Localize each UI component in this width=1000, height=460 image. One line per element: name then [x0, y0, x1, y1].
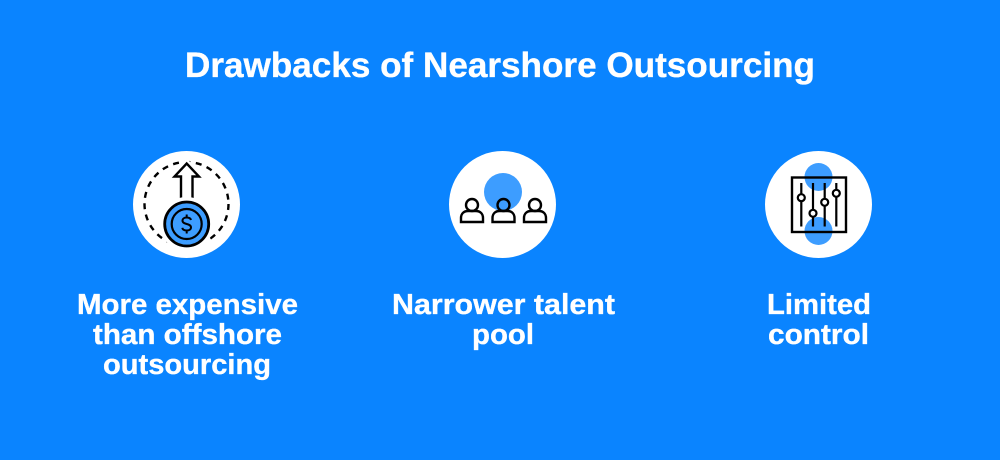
panel: narrower talent pool [392, 151, 616, 351]
label: narrower talent pool [392, 289, 616, 351]
icon: three people [449, 151, 556, 258]
icon: coin with up arrow [133, 151, 240, 258]
label: limited control: Limited [767, 289, 871, 321]
panel: limited control [765, 151, 872, 351]
label: narrower talent pool: Narrower talent [392, 289, 616, 321]
label: more expensive: outsourcing [103, 349, 271, 381]
title: Drawbacks of Nearshore Outsourcing [185, 46, 815, 85]
label: limited control [767, 289, 871, 351]
label: limited control: control [768, 319, 869, 351]
label: more expensive [77, 289, 298, 381]
icon: sliders [765, 151, 872, 258]
label: narrower talent pool: pool [472, 319, 534, 351]
label: more expensive: More expensive [77, 289, 298, 321]
panel: more expensive [77, 151, 298, 381]
label: more expensive: than offshore [93, 319, 282, 351]
